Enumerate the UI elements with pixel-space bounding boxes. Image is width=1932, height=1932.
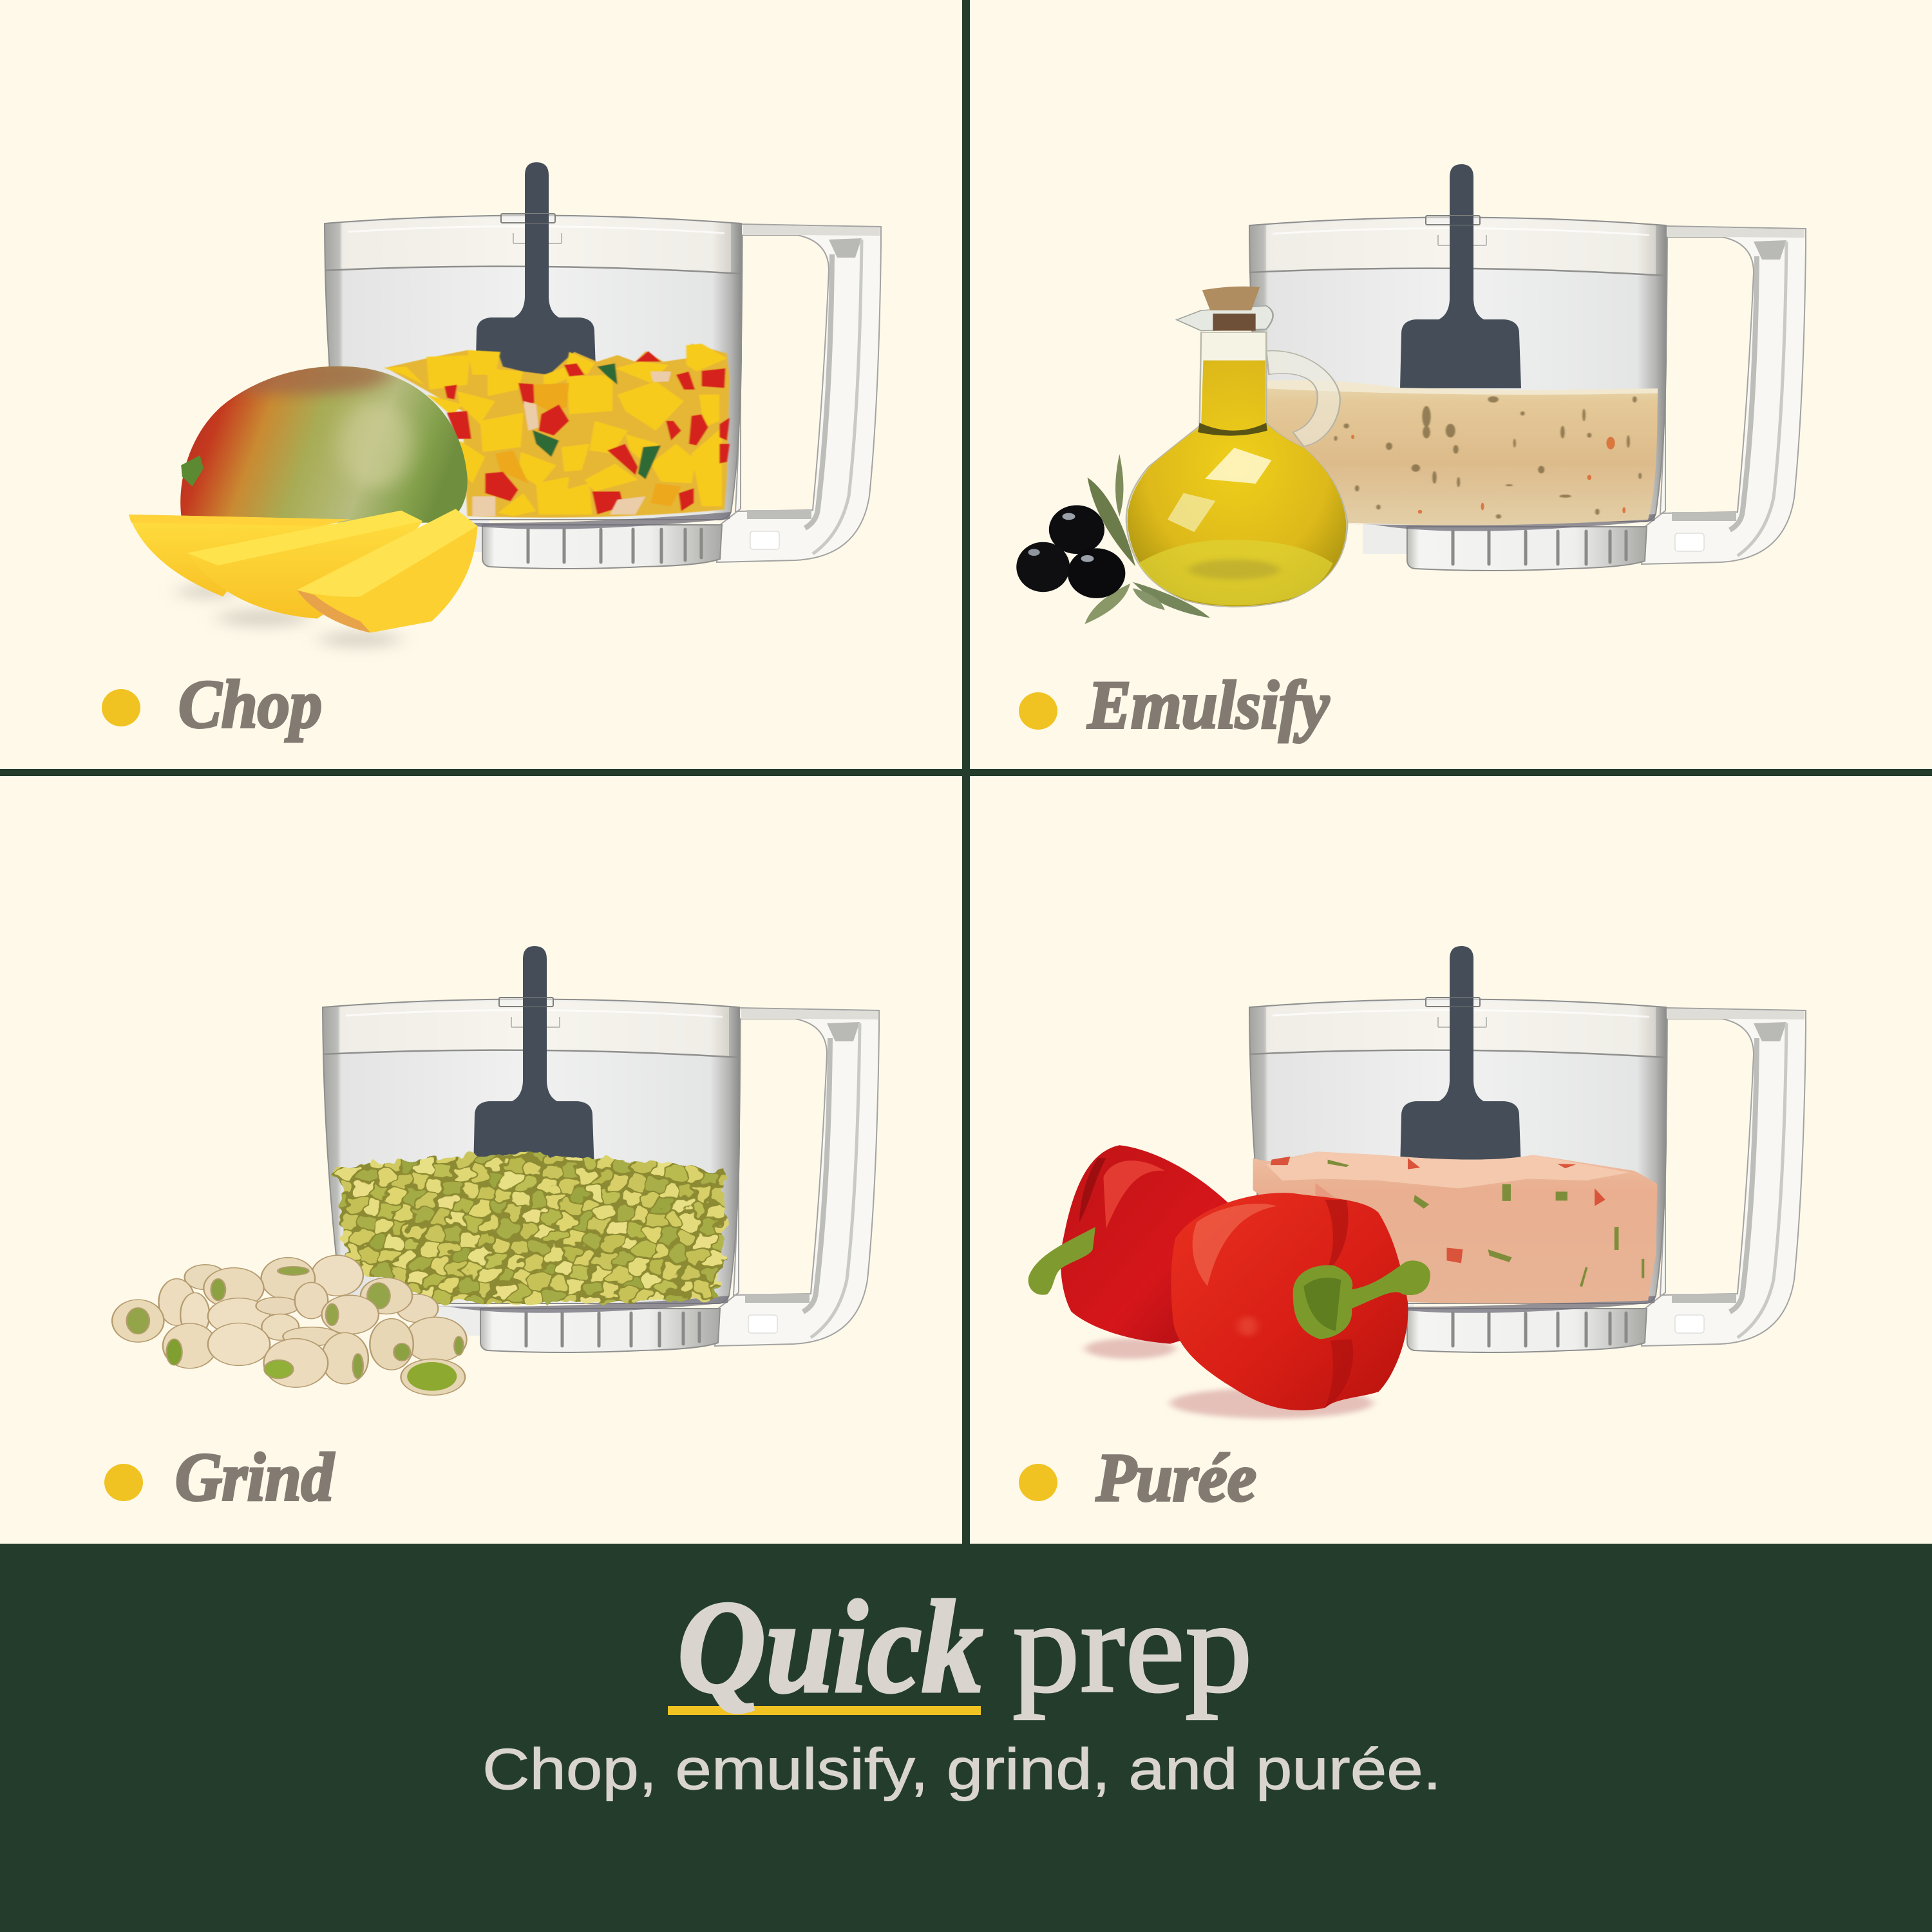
label dot: chop — [102, 689, 140, 726]
panel: grind — [104, 946, 879, 1515]
olive sprig — [1016, 454, 1210, 624]
footer band — [0, 1544, 1932, 1932]
subheading: Chop, emulsify, grind, and purée. — [482, 1738, 1441, 1802]
label: chop: Chop — [178, 667, 322, 742]
pepper puree — [1253, 1151, 1657, 1303]
label dot: puree — [1019, 1464, 1057, 1501]
panel: chop — [102, 162, 881, 742]
pepper shadows — [1084, 1338, 1373, 1419]
whole pistachios — [112, 1255, 467, 1395]
food processor bowl: chop — [325, 162, 881, 569]
panel: emulsify — [1016, 164, 1806, 743]
food processor bowl: emulsify — [1249, 164, 1806, 571]
heading second word: prep — [1012, 1574, 1253, 1720]
mango slices — [129, 509, 477, 633]
heading underline — [668, 1706, 981, 1715]
heading: Quick — [677, 1574, 983, 1720]
ground pistachios — [335, 1154, 725, 1303]
label: grind: Grind — [175, 1439, 335, 1515]
panel: puree — [1019, 946, 1806, 1515]
divider lines — [0, 0, 1932, 1546]
label: puree: Purée — [1095, 1440, 1256, 1515]
whole mango — [180, 355, 468, 523]
label: emulsify: Emulsify — [1087, 667, 1330, 743]
emulsified dressing — [1266, 380, 1658, 526]
label dot: emulsify — [1019, 692, 1057, 730]
food processor bowl: grind — [323, 946, 879, 1352]
mango shadows — [177, 585, 401, 648]
chopped mango salsa — [383, 344, 730, 518]
olive oil bottle — [1126, 287, 1347, 607]
label dot: grind — [104, 1464, 143, 1501]
food processor bowl: puree — [1249, 946, 1806, 1352]
red bell peppers — [1028, 1145, 1430, 1410]
